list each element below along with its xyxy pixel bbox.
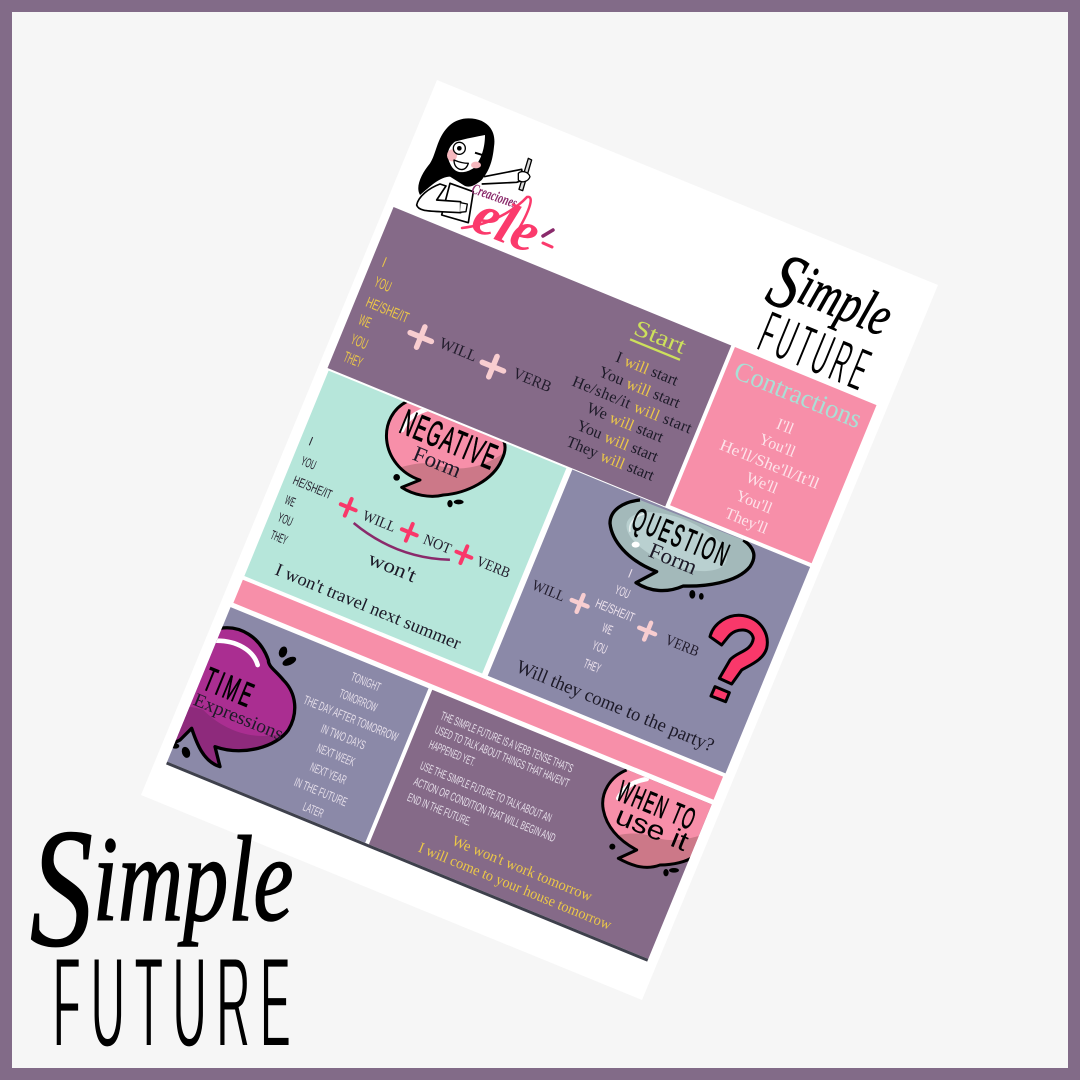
- speech bubble: when to use it: [603, 770, 717, 880]
- subject pronouns list: WE: [356, 312, 374, 332]
- pronoun list: YOU: [299, 453, 318, 473]
- question example sentence: Will they come to the party?: [513, 657, 717, 756]
- character illustration: [417, 118, 532, 223]
- icon: plus: [636, 619, 658, 643]
- icon: plus: [453, 543, 475, 566]
- negative example sentence: I won't travel next summer: [272, 559, 464, 653]
- time expressions list: NEXT YEAR: [308, 760, 349, 787]
- panel: question form: [488, 469, 810, 773]
- bubble text: Form: [645, 537, 701, 579]
- contraction curve: [351, 521, 450, 569]
- contractions heading: Contractions: [730, 355, 866, 434]
- example conjugation list: I will start: [613, 349, 681, 390]
- contractions list: They'll: [722, 505, 771, 538]
- pronoun list: I: [307, 434, 315, 449]
- contractions list: You'll: [756, 431, 798, 461]
- formula word: will: WILL: [360, 508, 398, 536]
- title word: Simple: S: [756, 235, 817, 329]
- panel: formula: [328, 207, 731, 507]
- time expressions list: TONIGHT: [349, 670, 383, 694]
- pronoun list: YOU: [613, 582, 632, 602]
- panel: negative form: [244, 371, 566, 674]
- bubble text: [192, 666, 282, 740]
- subject pronouns list: YOU: [348, 331, 370, 353]
- time expressions list: IN TWO DAYS: [319, 722, 368, 752]
- contractions list: I'll: [774, 416, 797, 438]
- logo swash: [462, 197, 531, 240]
- yellow example sentences: We won't work tomorrow: [449, 833, 594, 905]
- pronoun list: YOU: [276, 510, 295, 529]
- title word: FUTURE: FUTURE: [52, 925, 300, 1078]
- example conjugation list: They will start: [564, 433, 657, 485]
- contractions list: You'll: [733, 487, 775, 518]
- bubble text: NEGATIVE: [394, 403, 504, 479]
- example conjugation list: He/she/it will start: [570, 373, 695, 438]
- formula word: not: NOT: [421, 532, 454, 558]
- formula word: will: WILL: [437, 335, 479, 365]
- pronoun list: HE/SHE/IT: [593, 596, 637, 625]
- title word: FUTURE: FUTURE: [749, 298, 883, 408]
- example conjugation list: We will start: [584, 400, 666, 446]
- panel: when to use it: [369, 690, 712, 959]
- formula word: verb: VERB: [663, 632, 701, 660]
- example conjugation list: You will start: [596, 364, 683, 412]
- bubble text: QUESTION: [627, 502, 736, 574]
- rotated worksheet panels: [165, 207, 877, 962]
- contractions list: He'll/She'll/It'll: [717, 437, 822, 493]
- panel: time expressions: [167, 607, 429, 843]
- subject pronouns list: HE/SHE/IT: [363, 294, 411, 327]
- icon: question mark: [710, 615, 767, 702]
- time expressions list: NEXT WEEK: [315, 741, 357, 769]
- logo word: ele: ele: [464, 181, 550, 266]
- panel: contractions: [670, 347, 877, 563]
- main title: Simple Future: [30, 795, 300, 1078]
- bubble text: TIME: [198, 660, 261, 715]
- icon: plus: [398, 521, 420, 544]
- formula word: will: WILL: [529, 578, 567, 605]
- bubble text: [616, 780, 696, 852]
- title word: Simple: S: [30, 795, 93, 983]
- pronoun list: HE/SHE/IT: [291, 473, 334, 502]
- time expressions list: THE DAY AFTER TOMORROW: [301, 693, 400, 744]
- subject pronouns list: [341, 254, 428, 381]
- contractions list: [694, 399, 838, 550]
- panel bottom shadow: [166, 762, 648, 962]
- explanation text: [405, 709, 585, 861]
- explanation text: THE SIMPLE FUTURE IS A VERB TENSE THAT'S: [439, 709, 575, 775]
- formula word: verb: VERB: [510, 365, 554, 396]
- example heading: start: Start: [630, 315, 691, 359]
- pronoun list: [571, 559, 652, 680]
- logo accent strokes: [543, 230, 553, 247]
- icon: plus: [406, 323, 436, 352]
- subject pronouns list: THEY: [341, 349, 365, 372]
- yellow example sentences: I will come to your house tomorrow: [416, 840, 614, 934]
- bubble text: Expressions: [190, 690, 286, 745]
- subject pronouns list: I: [380, 254, 389, 271]
- bubble text: use it: [611, 800, 693, 857]
- time expressions list: TOMORROW: [337, 686, 380, 715]
- bubble text: Form: [409, 441, 465, 483]
- explanation text: USED TO TALK ABOUT THINGS THAT HAVEN'T: [433, 723, 572, 790]
- explanation text: HAPPENED YET.: [427, 737, 478, 769]
- pronoun list: WE: [600, 620, 615, 638]
- pronoun list: THEY: [268, 527, 290, 548]
- pronoun list: [268, 434, 350, 557]
- icon: plus: [478, 352, 508, 381]
- speech bubble: time expressions: [172, 626, 296, 768]
- explanation text: END IN THE FUTURE.: [405, 790, 473, 829]
- logo word: Creaciones: Creaciones: [469, 181, 519, 212]
- title word: Simple: imple: [790, 254, 902, 348]
- worksheet paper: [141, 80, 938, 1000]
- bubble text: WHEN TO: [612, 776, 701, 838]
- logo: Creaciones ELE: [417, 118, 553, 266]
- time expressions list: LATER: [301, 800, 326, 821]
- explanation text: USE THE SIMPLE FUTURE TO TALK ABOUT AN: [418, 759, 554, 825]
- example conjugation list: You will start: [574, 417, 661, 466]
- contraction word: won't: won't: [365, 548, 420, 587]
- pronoun list: YOU: [590, 637, 610, 657]
- speech bubble: question form: [610, 500, 754, 600]
- time expressions list: IN THE FUTURE: [292, 775, 349, 809]
- speech bubble: negative form: [380, 402, 510, 507]
- time expressions list: [264, 656, 415, 836]
- example conjugation list: [548, 337, 710, 491]
- contractions list: We'll: [743, 469, 781, 498]
- icon: plus: [337, 496, 359, 519]
- formula word: verb: VERB: [474, 554, 512, 582]
- title word: Simple: imple: [93, 812, 293, 947]
- icon: plus: [568, 592, 591, 615]
- pronoun list: WE: [283, 492, 298, 510]
- explanation text: ACTION OR CONDITION THAT WILL BEGIN AND: [412, 774, 558, 845]
- pronoun list: I: [626, 566, 635, 581]
- subject pronouns list: YOU: [372, 274, 394, 296]
- pronoun list: THEY: [582, 656, 603, 676]
- small title: Simple Future: [739, 235, 907, 408]
- pink divider band: [233, 580, 723, 800]
